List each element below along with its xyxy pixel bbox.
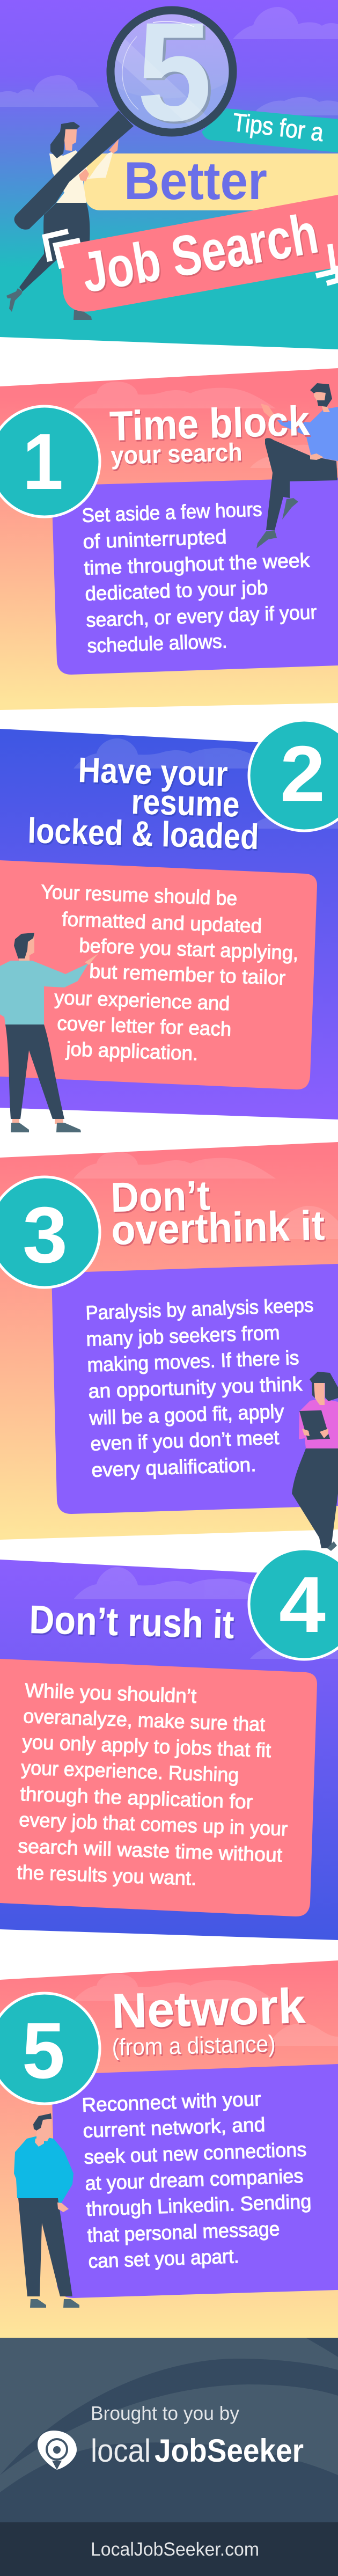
tip 1 heading [109, 397, 311, 470]
tip 4 heading: Don’t rush it [29, 1597, 235, 1647]
tip 3 body text: many job seekers from [86, 1321, 280, 1350]
woman hair [50, 122, 80, 158]
magnifying glass [14, 0, 233, 230]
heading line 1: Don’t [111, 1172, 210, 1221]
clouds [0, 7, 338, 115]
woman front hand [79, 169, 89, 181]
woman face [64, 129, 77, 151]
tip 5 body text: can set you apart. [88, 2245, 239, 2272]
tip 4 body text: you only apply to jobs that fit [22, 1731, 272, 1761]
woman pants [19, 203, 90, 291]
wordmark: local: local [91, 2433, 151, 2469]
tip 2 background [0, 729, 338, 1119]
tip 4 body text: While you shouldn’t [25, 1679, 197, 1707]
tip 4 clouds [74, 1567, 338, 1659]
tip 1 background [0, 368, 338, 710]
badge number 3: 3 [23, 1191, 68, 1279]
tip 2 body text: formatted and updated [62, 908, 262, 937]
tip 5 body text: seek out new connections [84, 2139, 307, 2168]
man pants [18, 2198, 72, 2296]
tip 4 body text: your experience. Rushing [21, 1757, 239, 1786]
banner: Tips for a (teal) [202, 108, 338, 152]
heading line 2: (from a distance) [112, 2031, 276, 2061]
wordmark: JobSeeker: JobSeeker [155, 2433, 304, 2469]
figure: woman with tablet [292, 1372, 338, 1551]
badge number 5: 5 [22, 2007, 65, 2095]
man hair [33, 2113, 52, 2131]
tip 4 card [0, 1659, 317, 1916]
tip 5 body text: at your dream companies [85, 2165, 304, 2194]
heading: Tips for a: Tips for a [231, 107, 326, 147]
tip 2 card [0, 860, 317, 1089]
tip 1 body text: dedicated to your job [85, 576, 268, 605]
man hair [14, 933, 34, 958]
heading line 2: overthink it [111, 1202, 325, 1254]
man face [36, 2114, 52, 2141]
footer swooshes [0, 2338, 338, 2522]
tip 3 body text [85, 1294, 314, 1481]
woman hands [302, 1429, 328, 1438]
tip 3 background [0, 1142, 338, 1540]
tip 4 body text [17, 1679, 288, 1890]
panel: footer [0, 2338, 338, 2576]
man hands [35, 2137, 69, 2212]
man shoes [11, 1123, 81, 1132]
heading line 1: Network [111, 1979, 306, 2039]
heading line 1: Have your [78, 750, 229, 794]
tip 1 body text [82, 498, 317, 657]
badge number 2: 2 [280, 730, 325, 818]
tip 3 body text: every qualification. [91, 1453, 256, 1481]
tip 5 body text [82, 2088, 312, 2272]
figure: thinking man [14, 2113, 79, 2308]
tip 3 card [52, 1264, 338, 1514]
woman hand [109, 139, 119, 153]
tip 3 body text: an opportunity you think [88, 1373, 303, 1402]
woman torso [49, 150, 89, 203]
tip 2 heading [27, 750, 260, 857]
tip 2 body text: before you start applying, [79, 934, 299, 964]
logo wordmark [91, 2433, 304, 2469]
man ankles [12, 1119, 63, 1124]
tip 1 body text: Set aside a few hours [82, 498, 262, 526]
pin inner cutouts [46, 2438, 68, 2461]
tip 1 body text: search, or every day if your [86, 601, 317, 631]
lens contents: number 5 [116, 21, 227, 126]
tip 1 clouds [74, 382, 338, 468]
tip 3 body text: will be a good fit, apply [89, 1400, 285, 1429]
man sweater [14, 2136, 74, 2207]
man face [19, 936, 34, 961]
tip 1 body text: schedule allows. [87, 630, 227, 657]
tip 4 body text: the results you want. [17, 1861, 197, 1890]
panel: tip 4 [0, 1549, 338, 1940]
tip 5 background [0, 1960, 338, 2338]
man pants [265, 438, 337, 530]
woman back arm [89, 151, 113, 179]
tip 4 body text: through the application for [20, 1783, 253, 1813]
banner: Job Search (pink) [59, 195, 338, 312]
panel: header [0, 0, 338, 349]
tip 5 clouds [74, 1974, 338, 2046]
logo: location pin [38, 2431, 77, 2470]
tip 2 clouds [74, 738, 338, 829]
man hand pointing [85, 954, 98, 965]
man torso and arm [277, 407, 338, 461]
banner: Better (yellow) [84, 153, 338, 210]
heading line 3: locked & loaded [27, 810, 260, 857]
man hand on knee [310, 453, 324, 460]
tip 5 card [52, 2064, 338, 2298]
corner brackets [45, 231, 338, 283]
heading line 1: Time block [109, 397, 311, 450]
magnifier ring [111, 10, 233, 133]
figure: woman holding magnifier [6, 122, 119, 320]
pin shape [38, 2431, 77, 2470]
tip 3 body text: Paralysis by analysis keeps [85, 1294, 314, 1324]
footer background [0, 2338, 338, 2522]
magnifier handle [14, 111, 134, 230]
tip 5 body text: through Linkedin. Sending [86, 2190, 312, 2220]
tip 4 body text: every job that comes up in your [19, 1809, 288, 1840]
badge circle [249, 1549, 338, 1659]
panel: tip 5 [0, 1960, 338, 2338]
heading: Better: Better [124, 151, 267, 210]
tip 4 background [0, 1560, 338, 1940]
tip 5 heading [111, 1979, 306, 2061]
tip 2 body text: Your resume should be [41, 881, 238, 910]
tip 3 heading [111, 1172, 325, 1254]
tip 2 body text: your experience and [54, 986, 230, 1014]
tip 1 body text: time throughout the week [84, 549, 311, 579]
woman sweater [299, 1399, 338, 1448]
badge circle [249, 720, 338, 831]
badge number 1: 1 [23, 418, 63, 506]
tip 3 badge [0, 1177, 100, 1287]
tip 3 body text: even if you don’t meet [90, 1426, 280, 1455]
tip 1 card [52, 478, 338, 675]
man shirt [0, 961, 89, 1024]
tip 4 body text: overanalyze, make sure that [23, 1705, 266, 1736]
tip 2 body text: cover letter for each [57, 1012, 232, 1040]
badge circle [0, 1993, 100, 2104]
figure: pointing man [0, 933, 98, 1132]
man shoes [30, 2299, 79, 2308]
panel: tip 3 [0, 1142, 338, 1551]
woman face [314, 1383, 325, 1405]
tip 3 body text: making moves. If there is [87, 1346, 299, 1376]
man hand [261, 404, 278, 420]
tip 1 body text: of uninterrupted [83, 526, 227, 553]
man pants [5, 1024, 64, 1119]
tip 4 body text: search will waste time without [18, 1835, 283, 1866]
badge circle [0, 406, 100, 517]
woman feet [327, 1541, 337, 1551]
woman pants [292, 1448, 338, 1548]
heading line 2: your search [111, 437, 243, 470]
badge number 4: 4 [279, 1561, 326, 1649]
man head [314, 391, 330, 412]
tip 5 body text: that personal message [87, 2218, 280, 2246]
footer url: LocalJobSeeker.com [91, 2539, 259, 2560]
woman tablet [299, 1410, 330, 1440]
footer text: brought to you by: Brought to you by [91, 2402, 239, 2424]
tip 5 body text: current network, and [83, 2113, 266, 2142]
tip 2 body text: but remember to tailor [89, 960, 286, 989]
header gradient background [0, 0, 338, 349]
footer bottom bar [0, 2522, 338, 2576]
tip 3 clouds [74, 1152, 338, 1239]
woman hair [310, 1372, 338, 1401]
man shoes [256, 530, 277, 548]
panel: tip 1 [0, 368, 338, 710]
man hair and beard [310, 383, 332, 407]
tip 5 badge [0, 1993, 100, 2104]
panel: tip 2 [0, 720, 338, 1132]
heading line 2: resume [131, 781, 240, 824]
tip 5 body text: Reconnect with your [82, 2088, 261, 2116]
tip 1 badge [0, 406, 100, 517]
tip 2 body text [41, 881, 299, 1065]
tip 2 body text: job application. [65, 1038, 199, 1065]
magnifier lens [114, 14, 229, 129]
tip 4 badge [249, 1549, 338, 1659]
tip 2 badge [249, 720, 338, 831]
figure: sitting man [256, 383, 338, 548]
woman boots [6, 288, 23, 312]
badge circle [0, 1177, 100, 1287]
